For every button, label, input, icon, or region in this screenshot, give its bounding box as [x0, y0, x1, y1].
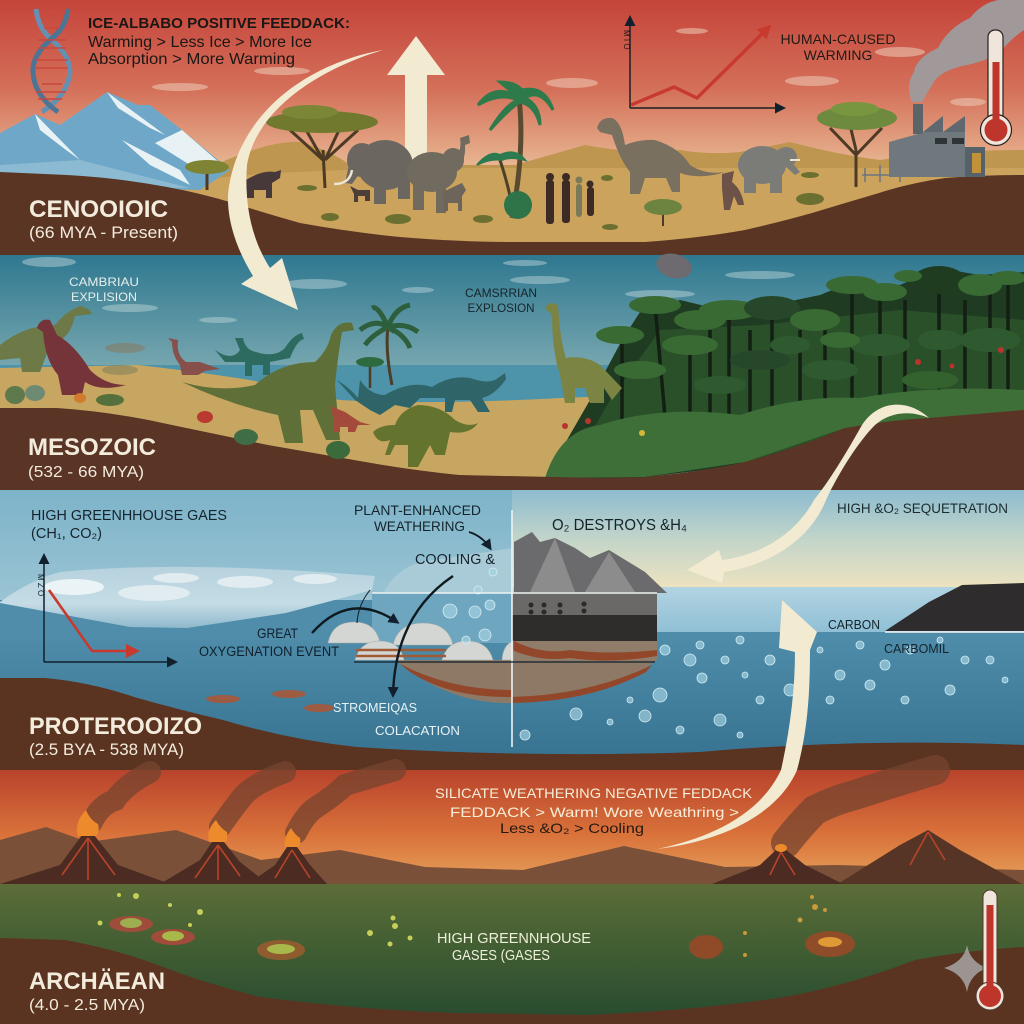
dinosaur: stegosaurus	[373, 405, 478, 467]
forest	[545, 266, 1024, 478]
heading: ice-albedo feedback: Absorption > More Warming	[88, 51, 295, 68]
label: high greenhouse gases: HIGH GREENNHOUSE	[437, 931, 591, 947]
flow arrow: top curve into Mesozoic	[228, 50, 383, 310]
era label: Cenozoic: (66 MYA - Present)	[29, 224, 178, 242]
label: Cambrian explosion center: CAMSRRIAN	[465, 286, 537, 300]
icon: thermometer	[980, 30, 1012, 146]
smoke plume	[909, 0, 1024, 102]
label: silicate weathering: Less &O₂ > Cooling	[500, 820, 644, 836]
era label: Mesozoic	[28, 434, 156, 481]
sparkle	[944, 945, 987, 992]
era label: Proterozoic: (2.5 BYA - 538 MYA)	[29, 741, 184, 759]
heading: ice-albedo feedback	[88, 15, 350, 68]
label: high greenhouse gases: HIGH GREENHHOUSE GAES	[31, 508, 227, 524]
icon: thermometer	[976, 890, 1004, 1010]
animal: dark mammal	[246, 170, 281, 198]
shrubs	[297, 172, 824, 230]
era label: Proterozoic: PROTEROOIZO	[29, 713, 202, 740]
label: high greenhouse gases	[437, 931, 591, 964]
palm trees	[477, 82, 553, 219]
label: human-caused warming	[780, 31, 896, 63]
weathering arrows	[312, 532, 490, 695]
line chart	[622, 18, 783, 108]
striped layer	[356, 650, 446, 656]
dinosaur: left green	[0, 306, 92, 372]
label: plant-enhanced weathering: WEATHERING	[374, 518, 465, 534]
label: Cambrian explosion left	[69, 275, 139, 304]
flow arrow: Proterozoic return	[687, 405, 929, 583]
panel: Proterozoic	[0, 490, 1024, 772]
small animals	[350, 183, 466, 211]
label: human-caused warming: HUMAN-CAUSED	[780, 31, 896, 47]
label: silicate weathering	[435, 785, 753, 836]
white divider lines	[372, 510, 1024, 747]
label: colacation: COLACATION	[375, 723, 460, 738]
upper sea right	[512, 587, 1024, 633]
glacier mountains	[0, 92, 230, 190]
label: Cambrian explosion center	[465, 286, 537, 315]
panel: Mesozoic	[0, 250, 1024, 491]
panel: Archaean	[0, 884, 1024, 1024]
label: high greenhouse gases	[31, 508, 227, 542]
line chart	[36, 556, 175, 662]
era label: Mesozoic: MESOZOIC	[28, 434, 156, 461]
flowers and shrubs	[5, 343, 350, 459]
rock cross-section	[395, 532, 667, 703]
arrow: up	[387, 36, 445, 160]
heading: ice-albedo feedback: Warming > Less Ice > More Ice	[88, 34, 312, 51]
era label: Proterozoic	[29, 713, 202, 759]
tree: acacia	[266, 105, 378, 188]
animal: long-neck dinosaur	[597, 118, 725, 194]
small tree	[644, 199, 682, 226]
small stromatolites	[206, 690, 334, 712]
era label: Archaean	[29, 968, 165, 1014]
red flowers	[562, 347, 1004, 436]
tree trunks	[622, 268, 1008, 455]
label: high greenhouse gases: (CH₁, CO₂)	[31, 526, 102, 542]
dinosaurs: teal herd	[337, 373, 506, 415]
left water	[0, 600, 512, 640]
line chart: M I O	[622, 30, 631, 50]
dinosaur: main sauropod	[182, 322, 354, 443]
desert hills	[215, 142, 1024, 200]
factory	[889, 104, 985, 177]
icon: DNA helix	[33, 9, 70, 112]
era label: Archaean: (4.0 - 2.5 MYA)	[29, 997, 145, 1014]
label: silicate weathering: FEDDACK > Warm! Wore Weathring >	[450, 804, 739, 820]
era label: Cenozoic: CENOOIOIC	[29, 196, 168, 223]
animal: elephant	[738, 146, 800, 193]
sea	[0, 365, 620, 410]
meteor	[654, 250, 694, 282]
mid water	[372, 593, 512, 643]
era label: Archaean: ARCHÄEAN	[29, 968, 165, 995]
animal: elephant two	[407, 135, 470, 213]
desert ground	[170, 168, 1024, 256]
palm tree large	[356, 305, 418, 388]
mountain ridge	[0, 827, 1024, 886]
label: great oxygenation event: OXYGENATION EVENT	[199, 644, 339, 659]
panel: Cenozoic	[0, 0, 1024, 256]
microbial mats	[98, 893, 855, 960]
ice sheet	[0, 567, 375, 628]
clouds	[22, 257, 795, 323]
line chart: M Z O	[36, 574, 45, 596]
tree crowns	[596, 266, 1024, 394]
label: stromeiqas: STROMEIQAS	[333, 700, 417, 715]
tree: small acacia	[185, 160, 229, 190]
flow arrow: up from volcanic band	[657, 600, 817, 849]
heading: ice-albedo feedback: ICE-ALBABO POSITIVE FEEDDACK:	[88, 15, 350, 32]
dinosaur: forest sauropod	[545, 303, 622, 403]
dinosaur: teal back	[215, 333, 304, 376]
animal: elephant one	[334, 140, 413, 204]
volcanoes	[0, 835, 843, 884]
era label: Mesozoic: (532 - 66 MYA)	[28, 464, 144, 481]
people group	[546, 173, 594, 224]
stromatolite domes	[328, 622, 513, 660]
label: carbomil: CARBOMIL	[884, 642, 949, 656]
animal: small deer	[722, 171, 744, 210]
label: great oxygenation event	[199, 626, 339, 659]
bubbles	[443, 568, 1008, 740]
soil	[0, 408, 1024, 491]
era label: Cenozoic	[29, 196, 178, 242]
label: plant-enhanced weathering: PLANT-ENHANCED	[354, 502, 481, 518]
label: Cambrian explosion left: EXPLISION	[71, 290, 137, 304]
label: plant-enhanced weathering	[354, 502, 481, 534]
panel: volcanic Archaean sky	[0, 770, 1024, 886]
label: high greenhouse gases: GASES (GASES	[452, 948, 550, 964]
label: silicate weathering: SILICATE WEATHERING NEGATIVE FEDDACK	[435, 785, 753, 801]
label: human-caused warming: WARMING	[804, 47, 872, 63]
dinosaur: maroon	[37, 320, 126, 395]
fence	[862, 165, 900, 182]
smoke plumes	[92, 770, 935, 843]
lava glows	[77, 810, 787, 852]
dinosaur: small brown	[168, 338, 220, 375]
label: cooling: COOLING &	[415, 552, 495, 568]
sunlit sky	[512, 490, 1024, 590]
right mountain	[836, 830, 1024, 885]
undergrowth	[545, 389, 1024, 478]
tree: acacia right	[817, 102, 897, 187]
soil	[0, 172, 1024, 256]
lower sea	[0, 632, 1024, 772]
dinosaur: red small	[330, 406, 371, 432]
label: Cambrian explosion center: EXPLOSION	[468, 301, 534, 315]
label: high CO2 sequestration: HIGH &O₂ SEQUETRATION	[837, 500, 1008, 516]
label: Cambrian explosion left: CAMBRIAU	[69, 275, 139, 289]
soil	[0, 678, 1024, 772]
coal hill	[885, 583, 1024, 631]
clouds	[152, 28, 986, 106]
far ice mountain	[384, 548, 513, 593]
lava flows	[62, 832, 945, 880]
soil	[0, 938, 1024, 1024]
label: carbon: CARBON	[828, 618, 880, 632]
land	[0, 365, 640, 480]
label: O2 destroys CH4: O₂ DESTROYS &H₄	[552, 517, 687, 534]
label: great oxygenation event: GREAT	[257, 626, 298, 641]
timeline line	[354, 661, 655, 663]
